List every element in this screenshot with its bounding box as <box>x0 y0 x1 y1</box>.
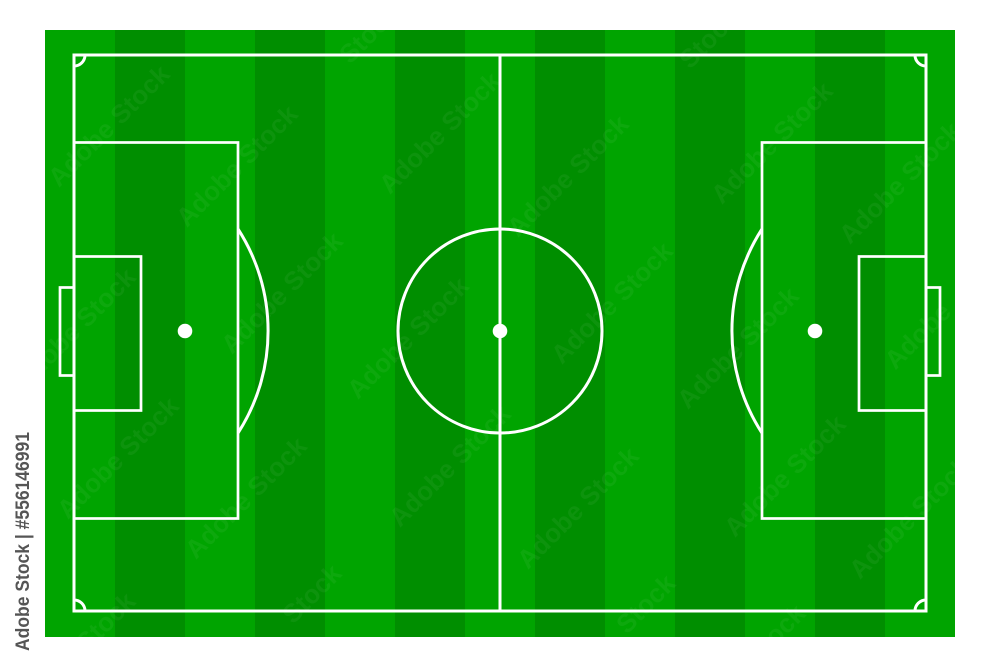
right penalty area <box>732 142 940 518</box>
watermark: repeated stock text: Stock <box>333 0 405 69</box>
watermark: repeated stock text: Adobe Stock <box>215 225 349 359</box>
watermark: repeated stock text: Adobe Stock <box>511 440 645 574</box>
pitch boundary lines <box>74 55 926 611</box>
left goal <box>60 288 74 376</box>
watermark: repeated stock text: Stock <box>673 3 745 74</box>
right penalty arc <box>732 229 762 433</box>
left penalty box <box>74 142 238 518</box>
watermark: repeated stock text: Adobe <box>878 296 957 375</box>
watermark: repeated stock text: Stock <box>276 558 348 629</box>
right penalty spot <box>808 324 822 338</box>
left goal area <box>74 256 141 410</box>
watermark: repeated stock text: Adobe Stock <box>170 98 304 232</box>
watermark: repeated stock text: Adobe Stock <box>42 58 176 192</box>
watermark: repeated stock text: Adobe Stock <box>383 398 517 532</box>
corner arcs <box>74 55 926 611</box>
left penalty spot <box>178 324 192 338</box>
watermark: repeated stock text: Adobe Stock <box>373 65 507 199</box>
watermark: repeated stock text: Adobe Stock <box>501 108 635 242</box>
watermark: repeated stock text: Adobe Stock <box>833 115 967 249</box>
watermark: repeated stock text: Adobe Stock <box>51 390 185 524</box>
left penalty arc <box>238 229 268 433</box>
right penalty box <box>762 142 926 518</box>
right goal <box>926 288 940 376</box>
center circle and kick-off spot <box>398 229 602 433</box>
halfway line <box>498 55 502 611</box>
watermark: repeated stock text: Adobe Stock <box>671 280 805 414</box>
watermark: repeated stock text: Adobe Stock <box>843 450 977 584</box>
vertical stock credit text: Adobe Stock | #556146991 <box>13 432 34 651</box>
watermark: repeated stock text: Adobe Stock <box>705 75 839 209</box>
watermark: repeated stock text: Adobe Stock <box>341 270 475 404</box>
right goal area <box>859 256 926 410</box>
watermark: repeated stock text: Adobe Stock <box>179 430 313 564</box>
left penalty area <box>60 142 268 518</box>
watermark: repeated stock text: Stock <box>610 568 682 639</box>
watermark: repeated stock text: Adobe Stock <box>718 408 852 542</box>
watermark: repeated stock text: Adobe Stock <box>8 261 142 395</box>
watermark: repeated stock text: Adobe Stock <box>545 235 679 369</box>
watermark: repeated stock text: Stock <box>70 586 142 657</box>
